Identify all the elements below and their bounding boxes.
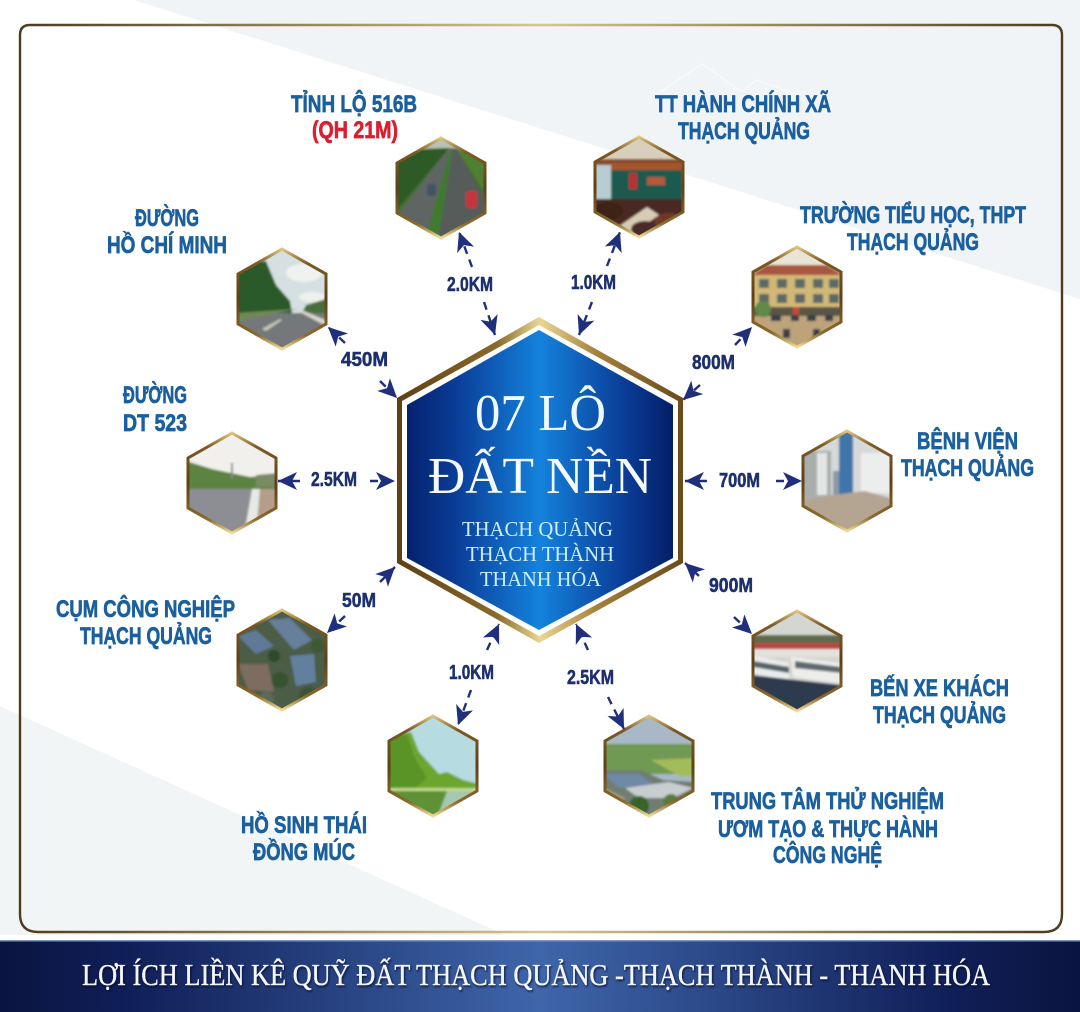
- central place names: [462, 517, 614, 591]
- distance: 2.5KM left: 2.5KM: [311, 469, 357, 491]
- central place names: THẠCH QUẢNG: [462, 517, 613, 541]
- label: ĐƯỜNG: [123, 381, 187, 409]
- label: CỤM CÔNG NGHIỆP: [56, 595, 235, 623]
- label: [870, 674, 1009, 729]
- label: THẠCH QUẢNG: [847, 227, 979, 256]
- pale diagonal top right: [134, 0, 1080, 299]
- distance: 2.0KM: [447, 232, 495, 335]
- label: THẠCH QUẢNG: [901, 453, 1034, 482]
- label: CÔNG NGHỆ: [773, 841, 882, 869]
- distance: 50M: [327, 567, 395, 633]
- label: BỆNH VIỆN: [917, 427, 1018, 455]
- label: [107, 204, 227, 259]
- distance: 2.5KM bottom: 2.5KM: [567, 667, 614, 689]
- photo: lake and green hill: [387, 714, 479, 818]
- label: [901, 427, 1034, 482]
- distance: 450M: [328, 327, 397, 398]
- photo: road with trees: [236, 247, 328, 351]
- pale diagonal bottom left: [0, 706, 505, 935]
- distance: 1.0KM top: [571, 232, 620, 335]
- distance: 2.0KM: 2.0KM: [447, 274, 493, 296]
- photo: bus station: [751, 609, 843, 713]
- distance: 900M: [685, 563, 753, 634]
- distance: 2.5KM left: [278, 469, 395, 491]
- label: [800, 201, 1026, 256]
- distance: 1.0KM bottom: 1.0KM: [449, 662, 494, 684]
- location: Tỉnh lộ 516B: [291, 89, 487, 240]
- label: THẠCH QUẢNG: [80, 621, 212, 650]
- location: Trường tiểu học, THPT: [751, 201, 1026, 349]
- central title line 1: 07 LÔ: [475, 384, 606, 442]
- label: TT HÀNH CHÍNH XÃ: [655, 90, 831, 118]
- distance: 800M: 800M: [692, 352, 735, 374]
- location: Bến xe khách: [751, 609, 1009, 729]
- label: [56, 595, 235, 650]
- label: BẾN XE KHÁCH: [870, 674, 1009, 702]
- photo: factory fields: [603, 714, 695, 818]
- label: [123, 381, 187, 437]
- label: HỒ SINH THÁI: [241, 811, 367, 839]
- label: (QH 21M): [312, 117, 398, 144]
- distance: 50M: 50M: [342, 590, 376, 612]
- location: Hồ sinh thái: [241, 714, 479, 866]
- label: [711, 786, 944, 869]
- label: HỒ CHÍ MINH: [107, 231, 227, 259]
- label: THẠCH QUẢNG: [873, 700, 1006, 729]
- label: THẠCH QUẢNG: [678, 116, 810, 145]
- location: Trung tâm thử nghiệm: [603, 714, 944, 869]
- distance: 900M: 900M: [709, 575, 753, 597]
- photo: highway: [395, 136, 487, 240]
- watermark: [660, 64, 790, 92]
- location: Cụm công nghiệp: [56, 595, 328, 712]
- distance: 700M: [685, 470, 802, 492]
- label: TỈNH LỘ 516B: [291, 89, 417, 118]
- photo: industrial aerial: [236, 608, 328, 712]
- distance: 2.5KM bottom: [567, 624, 624, 729]
- central place names: THẠCH THÀNH: [466, 542, 614, 566]
- label: ĐỒNG MÚC: [253, 838, 355, 866]
- distance: 700M: 700M: [719, 470, 760, 492]
- central place names: THANH HÓA: [480, 567, 602, 591]
- label: ƯƠM TẠO & THỰC HÀNH: [718, 815, 938, 843]
- distance: 800M: [683, 327, 752, 400]
- distance: 1.0KM bottom: [449, 624, 499, 725]
- central hexagon: [397, 317, 683, 643]
- label: [241, 811, 367, 866]
- central title line 2: ĐẤT NỀN: [428, 446, 652, 505]
- location: Đường Hồ Chí Minh: [107, 204, 328, 351]
- photo: school: [751, 245, 843, 349]
- photo: hospital corridor: [801, 429, 893, 533]
- distance: 1.0KM top: 1.0KM: [571, 272, 616, 294]
- distance: 450M: 450M: [341, 349, 388, 371]
- label: [291, 89, 417, 144]
- label: TRUNG TÂM THỬ NGHIỆM: [711, 786, 944, 815]
- bottom banner: [0, 940, 1080, 1012]
- label: [655, 90, 831, 145]
- label: DT 523: [123, 410, 187, 437]
- photo: provincial road: [186, 431, 278, 535]
- location: TT hành chính xã: [593, 90, 831, 239]
- photo: meeting hall: [593, 135, 685, 239]
- label: ĐƯỜNG: [135, 204, 199, 232]
- location: Bệnh viện: [801, 427, 1034, 533]
- location: Đường DT 523: [123, 381, 278, 535]
